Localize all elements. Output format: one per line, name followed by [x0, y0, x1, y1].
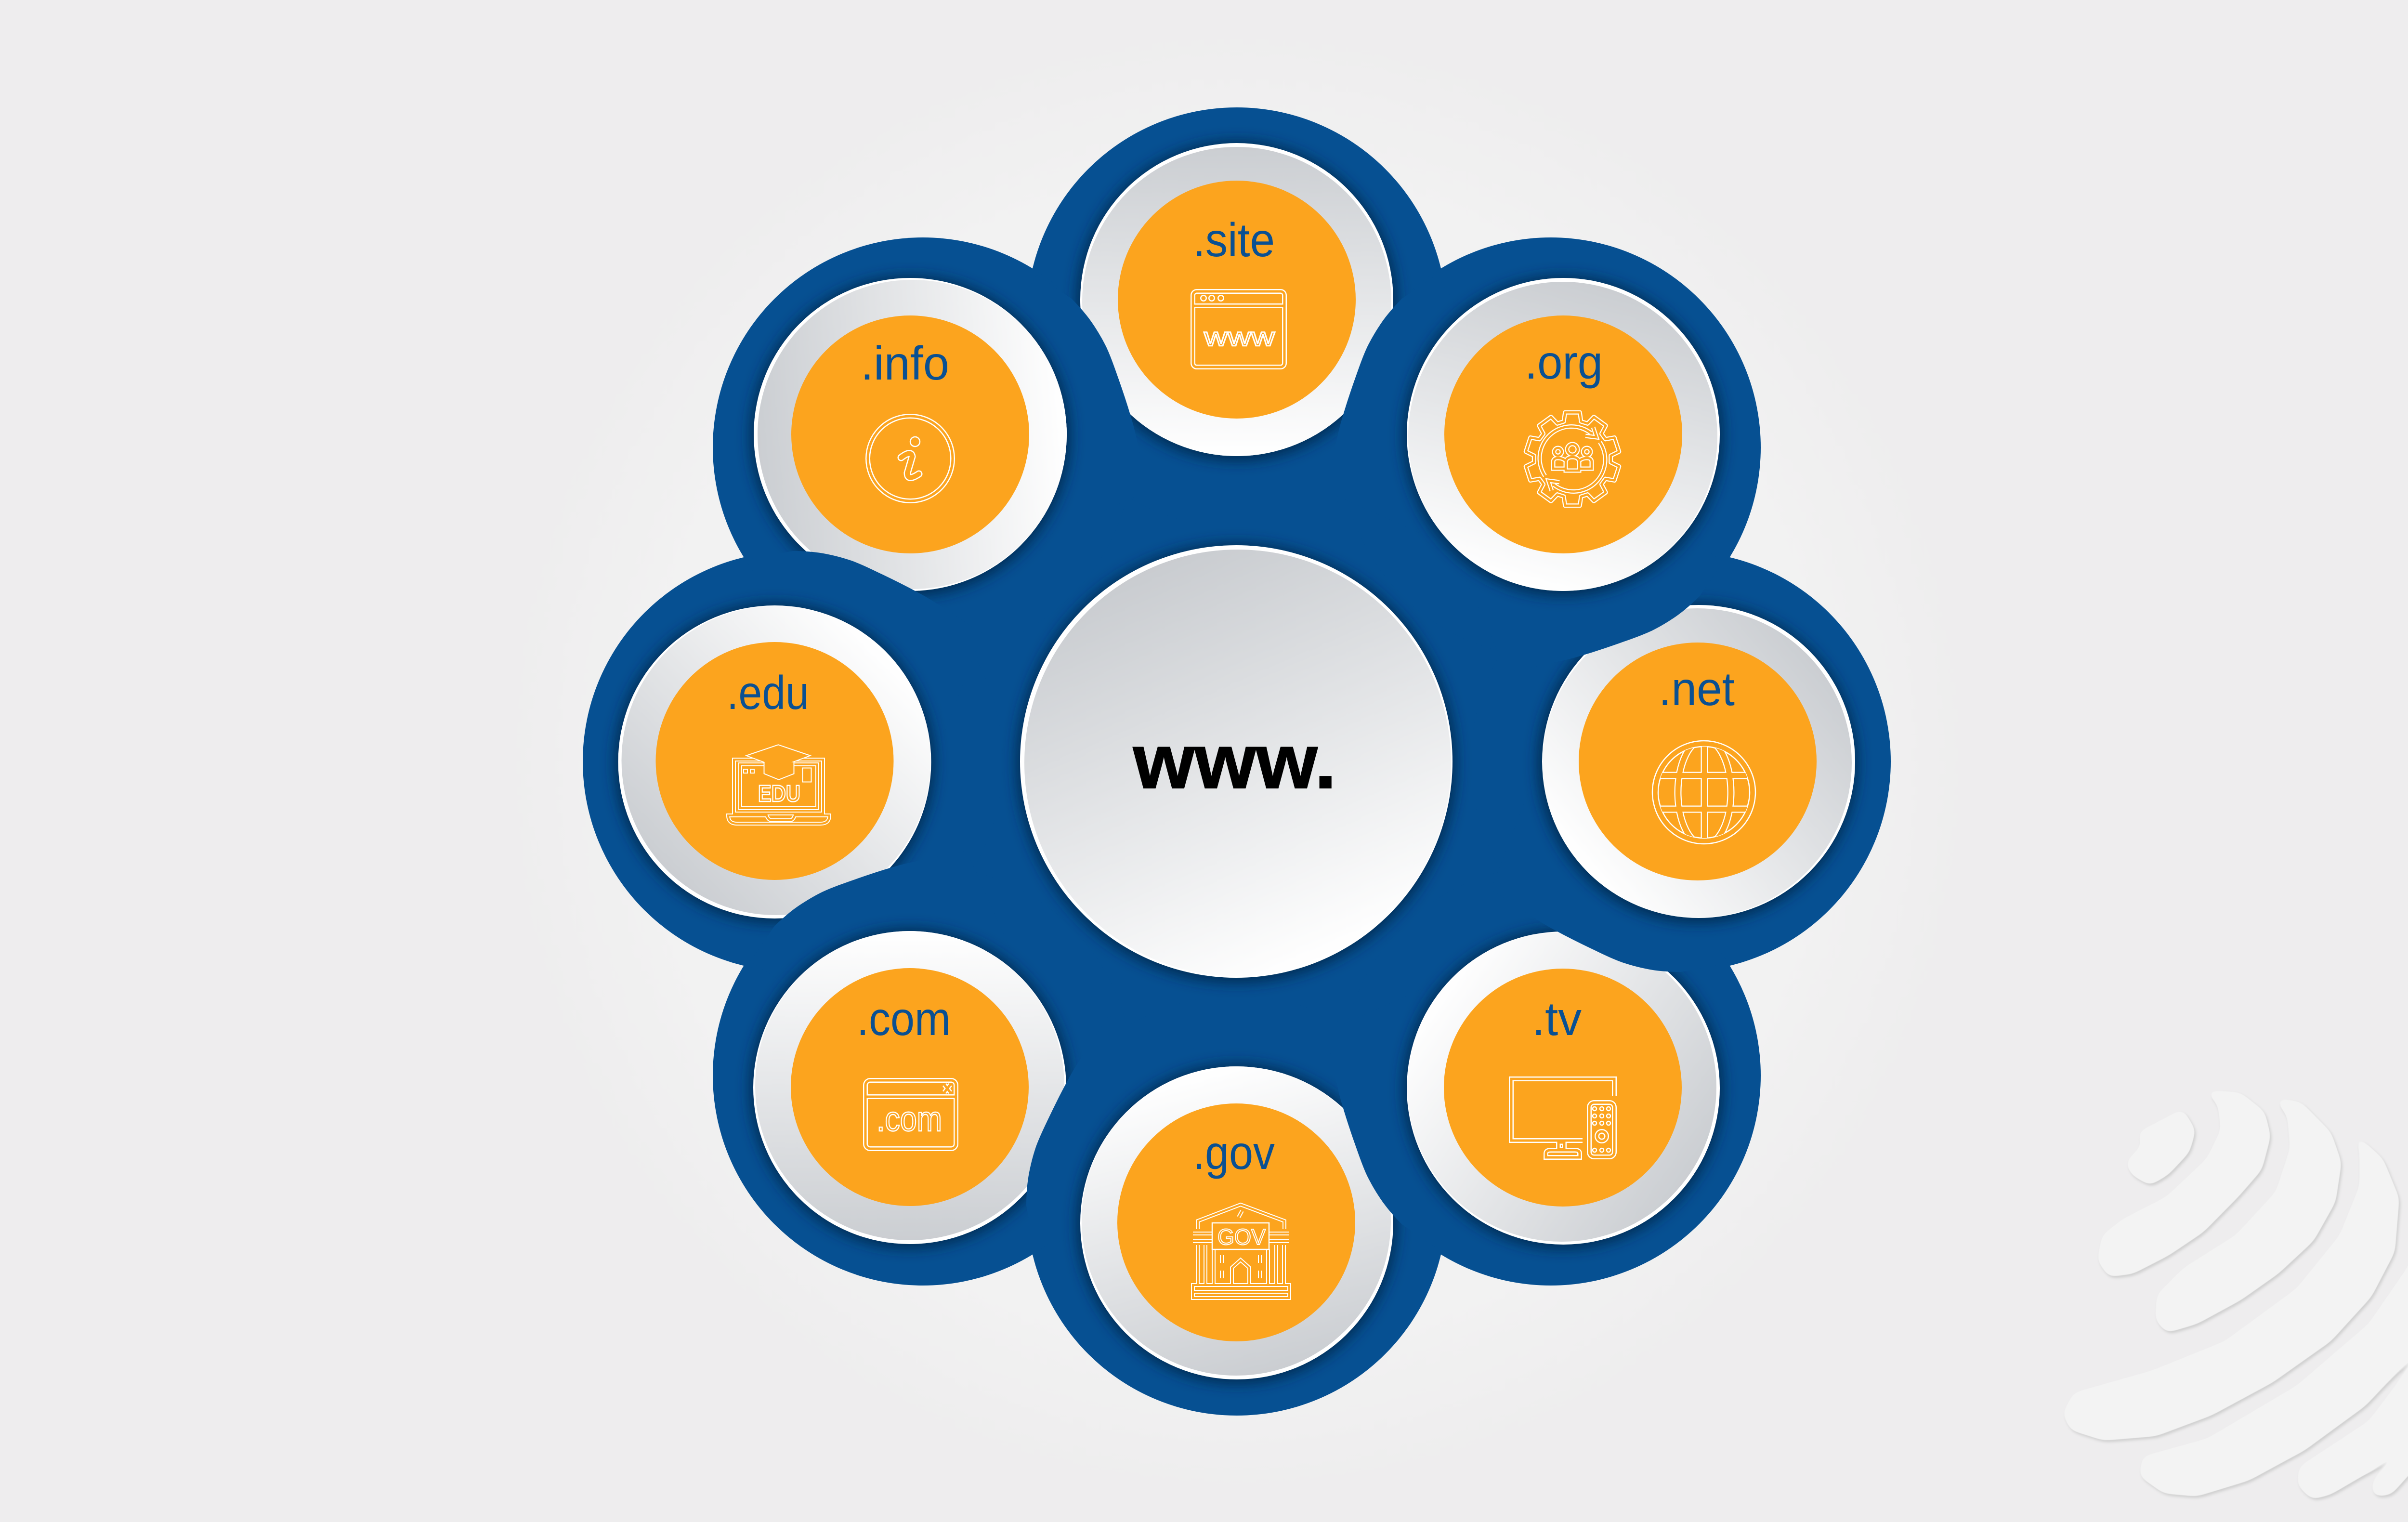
blue flap over .site from .org	[1268, 269, 1570, 571]
blue flap over .edu from .com	[745, 792, 1047, 1094]
node: .net	[1538, 603, 1858, 923]
icon: browser window .com: .com	[877, 1100, 942, 1139]
node: .tv	[1403, 929, 1723, 1249]
icon: info circle	[868, 416, 953, 501]
blue flap over .tv from .net	[1491, 776, 1722, 972]
node: .gov	[1077, 1064, 1397, 1384]
icon: government building: GOV	[1217, 1224, 1266, 1249]
label: .tv: .tv	[1532, 992, 1582, 1045]
node: .info	[750, 276, 1070, 596]
icon: laptop with graduation cap	[728, 747, 829, 824]
node: .edu	[615, 603, 934, 923]
label: .site: .site	[1193, 213, 1275, 266]
label: .gov: .gov	[1193, 1126, 1275, 1179]
label: .org: .org	[1525, 336, 1603, 389]
blue flap over .site from .info	[904, 269, 1206, 571]
blue flap over .com from .gov	[1026, 1016, 1222, 1247]
watermark: faint globe	[2065, 1092, 2408, 1497]
icon: globe	[1652, 737, 1758, 848]
label: .net: .net	[1659, 662, 1735, 715]
node: .org	[1403, 276, 1723, 596]
label: .com: .com	[857, 992, 951, 1045]
label: .info: .info	[861, 337, 949, 390]
node: .com	[750, 929, 1070, 1248]
icon: gear with team	[1526, 412, 1619, 506]
blue flower backdrop	[583, 107, 1891, 1416]
icon: browser window www	[1193, 291, 1284, 367]
blue flap over .info from .edu	[751, 551, 982, 747]
icon: browser window www: www	[1204, 323, 1275, 352]
blue flap over .net from .org	[1427, 429, 1729, 731]
icon: government building	[1193, 1205, 1289, 1298]
label: .edu: .edu	[727, 666, 809, 719]
node: .site	[1077, 141, 1397, 461]
heading: www.: www.	[1133, 718, 1336, 804]
icon: laptop with graduation cap: EDU	[758, 781, 800, 807]
blue flap over .gov from .tv	[1268, 952, 1570, 1254]
icon: browser window .com	[865, 1080, 956, 1149]
centre circle	[1017, 543, 1456, 983]
icon: television and remote	[1511, 1079, 1614, 1157]
